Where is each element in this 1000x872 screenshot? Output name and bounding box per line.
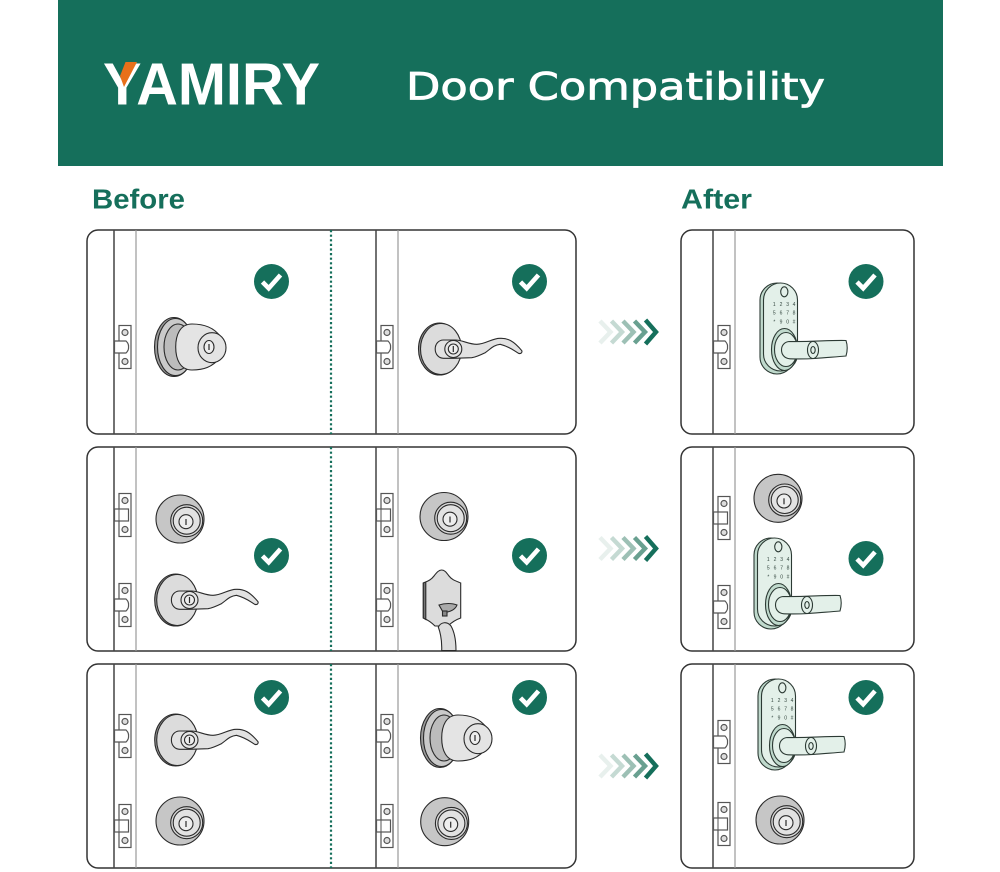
panel: row 2 before <box>87 447 576 651</box>
smart lock: 5 <box>773 310 776 316</box>
latch <box>114 714 131 758</box>
heading: After: After <box>681 184 752 214</box>
smart lock: 1 <box>767 557 770 563</box>
smart lock: 1 <box>773 302 776 308</box>
check icon <box>512 680 547 715</box>
smart lock: 7 <box>780 566 783 572</box>
smart lock: 9 <box>774 574 777 580</box>
smart lock: 4 <box>791 698 794 704</box>
smart lock <box>754 538 841 629</box>
smart lock: 7 <box>786 310 789 316</box>
smart lock: 2 <box>778 698 781 704</box>
latch <box>376 494 393 536</box>
lever lock <box>155 714 258 766</box>
header banner <box>58 0 943 166</box>
smart lock: 3 <box>784 698 787 704</box>
panel: row 3 after <box>681 664 914 868</box>
smart lock <box>760 283 847 374</box>
smart lock: 0 <box>780 574 783 580</box>
panel: row 1 before <box>87 230 576 434</box>
smart lock: 4 <box>787 557 790 563</box>
deadbolt <box>156 495 204 543</box>
logo: YAMIRY: YAMIRY <box>103 50 320 118</box>
handleset <box>423 570 461 650</box>
smart lock: 6 <box>774 566 777 572</box>
latch <box>376 804 393 848</box>
panel: row 3 before <box>87 664 576 868</box>
panel: row 2 after <box>681 447 914 651</box>
smart lock: 8 <box>793 310 796 316</box>
smart lock: 0 <box>784 716 787 722</box>
latch <box>376 714 393 758</box>
smart lock: 3 <box>786 302 789 308</box>
latch <box>714 720 730 764</box>
smart lock: 5 <box>771 706 774 712</box>
check icon <box>848 680 884 715</box>
check icon <box>254 680 289 715</box>
smart lock: 6 <box>780 310 783 316</box>
latch <box>714 586 730 628</box>
latch <box>376 326 393 368</box>
smart lock: 0 <box>786 320 789 326</box>
smart lock: * <box>773 320 775 326</box>
smart lock: 9 <box>780 320 783 326</box>
smart lock <box>758 679 845 770</box>
check icon <box>512 538 547 573</box>
smart lock: 9 <box>778 716 781 722</box>
deadbolt <box>754 474 802 522</box>
arrow: row 2 <box>600 536 656 560</box>
latch <box>714 802 730 846</box>
check icon <box>848 264 884 299</box>
lever lock <box>155 574 258 626</box>
arrow: row 1 <box>600 320 656 344</box>
title: Door Compatibility <box>406 66 825 108</box>
heading: Before: Before <box>92 184 185 214</box>
smart lock: # <box>787 574 790 580</box>
knob lock <box>154 318 226 376</box>
panel: row 1 after <box>681 230 914 434</box>
latch <box>714 326 730 368</box>
latch <box>376 584 393 626</box>
smart lock: 4 <box>793 302 796 308</box>
smart lock: 3 <box>780 557 783 563</box>
arrow: row 3 <box>600 754 656 778</box>
deadbolt <box>756 796 804 844</box>
check icon <box>848 541 884 576</box>
smart lock: * <box>767 574 769 580</box>
smart lock: * <box>771 716 773 722</box>
smart lock: # <box>791 716 794 722</box>
knob lock <box>420 708 492 768</box>
latch <box>114 804 131 848</box>
check icon <box>512 264 547 299</box>
smart lock: 1 <box>771 698 774 704</box>
latch <box>114 584 131 626</box>
smart lock: # <box>793 320 796 326</box>
deadbolt <box>156 797 204 845</box>
smart lock: 2 <box>774 557 777 563</box>
latch <box>114 494 131 536</box>
lever lock <box>418 323 522 375</box>
smart lock: 7 <box>784 706 787 712</box>
latch <box>714 496 730 540</box>
deadbolt <box>421 798 469 846</box>
smart lock: 2 <box>780 302 783 308</box>
smart lock: 8 <box>787 566 790 572</box>
check icon <box>254 264 289 299</box>
check icon <box>254 538 289 573</box>
smart lock: 6 <box>778 706 781 712</box>
smart lock: 8 <box>791 706 794 712</box>
deadbolt <box>420 492 468 540</box>
smart lock: 5 <box>767 566 770 572</box>
latch <box>114 326 131 368</box>
